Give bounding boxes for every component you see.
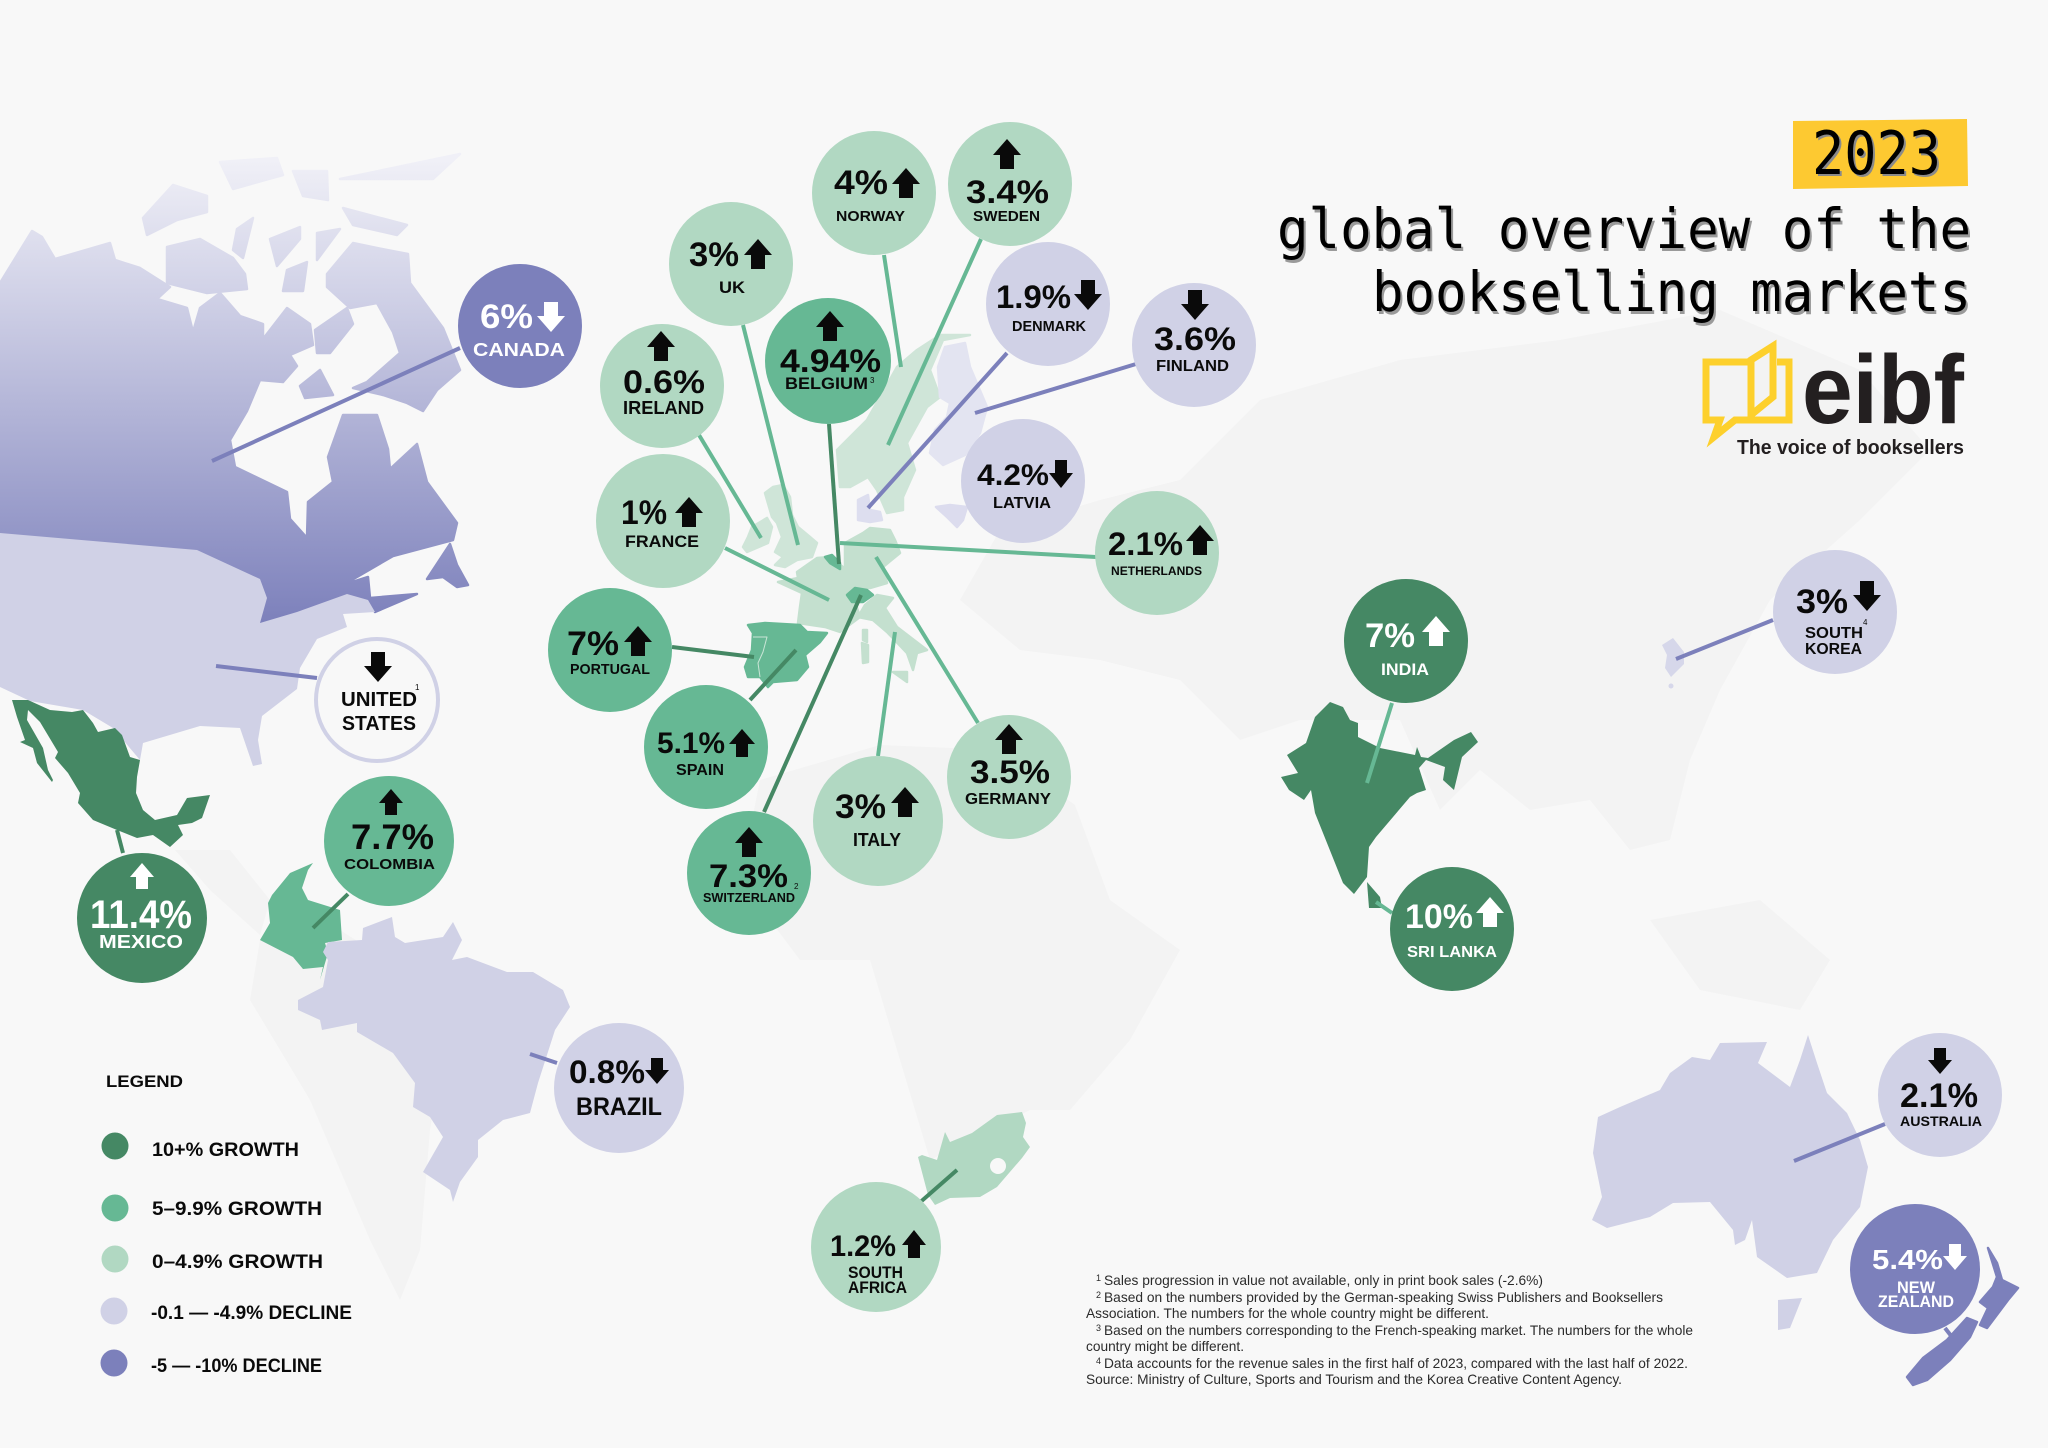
title: global overview of the: [1279, 200, 1973, 264]
leader lines: [117, 239, 1952, 1337]
bubble: France: [596, 454, 730, 588]
bubble: Netherlands: 2.1%: [1108, 526, 1183, 562]
bubble: Ireland: [600, 324, 724, 448]
footnotes: Based on the numbers provided by the German-speaking Swiss Publishers and Booksellers: [1104, 1290, 1663, 1305]
bubble: Switzerland: [687, 811, 811, 935]
bubble: Brazil: BRAZIL: [576, 1093, 662, 1121]
map: South Africa: [918, 1112, 1030, 1205]
legend: [100, 1072, 352, 1377]
footnotes: 4: [1096, 1356, 1101, 1366]
title: bookselling markets: [1374, 263, 1973, 327]
map: Denmark: [858, 495, 882, 522]
bubble: South Africa: AFRICA: [848, 1279, 907, 1297]
bubble: Denmark: DENMARK: [1012, 318, 1086, 335]
bubble: Belgium: 3: [870, 376, 875, 385]
bubble: Mexico: 11.4%: [90, 893, 192, 937]
footnotes: Association. The numbers for the whole country might be different.: [1086, 1306, 1489, 1321]
bubble: Italy: ITALY: [853, 830, 901, 850]
footnotes: 2: [1096, 1290, 1101, 1300]
legend: -0.1 — -4.9% DECLINE: [151, 1303, 352, 1324]
bubble: Canada: 6%: [480, 298, 533, 336]
bubble: Portugal: [548, 588, 672, 712]
bubble: India: [1344, 579, 1468, 703]
map: Colombia: [260, 863, 342, 980]
bubble: South Korea: 4: [1863, 618, 1868, 627]
bubble: Sweden: [948, 122, 1072, 246]
bubble: France: FRANCE: [625, 532, 699, 551]
map: Ireland: [743, 518, 772, 552]
bubble: Finland: [1132, 283, 1256, 407]
bubble: South Korea: KOREA: [1805, 641, 1862, 658]
map: United Kingdom: [765, 485, 817, 567]
bubble: Switzerland: 2: [794, 882, 799, 891]
map: South Korea: [1662, 638, 1684, 688]
legend: 0–4.9% GROWTH: [152, 1252, 323, 1273]
bubble: South Korea: [1773, 550, 1897, 674]
bubble: Spain: 5.1%: [657, 727, 725, 760]
map: Finland: [930, 343, 987, 465]
bubble: United States: 1: [415, 683, 420, 692]
bubble: Latvia: LATVIA: [993, 495, 1051, 512]
map: Switzerland: [847, 588, 873, 602]
bubble: United States: [316, 639, 438, 761]
bubble: Norway: 4%: [834, 164, 888, 202]
bubble: Brazil: 0.8%: [569, 1054, 645, 1090]
bubble: Canada: [458, 264, 582, 388]
map: Norway and Sweden: [837, 335, 970, 513]
bubble: Mexico: MEXICO: [99, 931, 183, 952]
logo: eibf: eibf: [1802, 335, 1965, 444]
bubble: Australia: AUSTRALIA: [1900, 1113, 1982, 1129]
bubble: Germany: GERMANY: [965, 791, 1051, 808]
bubble: Sri Lanka: 10%: [1405, 898, 1473, 936]
footnotes: [1086, 1273, 1693, 1387]
legend: 10+% GROWTH: [152, 1140, 299, 1161]
bubble: Ireland: 0.6%: [623, 364, 705, 400]
bubble: Germany: [947, 715, 1071, 839]
map: Belgium: [825, 555, 840, 569]
bubble: New Zealand: 5.4%: [1872, 1244, 1943, 1275]
bubble: Ireland: IRELAND: [623, 398, 704, 418]
bubble: Australia: [1878, 1033, 2002, 1157]
bubble: Colombia: 7.7%: [351, 818, 434, 857]
logo: eibf: [1706, 335, 1965, 459]
bubble: Switzerland: 7.3%: [709, 858, 788, 894]
bubble: Portugal: 7%: [567, 625, 619, 663]
footnotes: Based on the numbers corresponding to the French-speaking market. The numbers for the whole: [1104, 1323, 1693, 1338]
legend: 5–9.9% GROWTH: [152, 1199, 322, 1220]
bubble: India: 7%: [1365, 617, 1415, 655]
bubble: UK: [669, 202, 793, 326]
bubble: Netherlands: [1095, 491, 1219, 615]
title: global overview of the: [1277, 197, 1971, 261]
bubble: Netherlands: NETHERLANDS: [1111, 564, 1202, 578]
bubble: Sweden: 3.4%: [966, 174, 1049, 210]
bubble: Italy: [813, 756, 943, 886]
bubble: Mexico: [77, 853, 207, 983]
legend: LEGEND: [106, 1072, 183, 1091]
icon: yellow book speech bubble: [1706, 346, 1789, 437]
logo: eibf: The voice of booksellers: [1737, 437, 1964, 459]
bubble: Latvia: [961, 419, 1085, 543]
map: Brazil: [298, 917, 570, 1202]
bubble: Australia: 2.1%: [1900, 1077, 1978, 1115]
bubble: Colombia: [324, 776, 454, 906]
bubble: New Zealand: ZEALAND: [1878, 1292, 1954, 1311]
footnotes: 3: [1096, 1323, 1101, 1333]
map: Australia: [1592, 1035, 1868, 1330]
bubble: South Africa: 1.2%: [830, 1230, 896, 1263]
bubble: UK: UK: [719, 278, 746, 297]
bubble: Belgium: BELGIUM: [785, 374, 868, 393]
footnotes: country might be different.: [1086, 1339, 1244, 1354]
map: Spain and Portugal: [745, 623, 827, 687]
bubble: Canada: CANADA: [473, 340, 565, 360]
map: New Zealand: [1907, 1248, 2018, 1385]
bubble: Brazil: [554, 1023, 684, 1153]
map: India: [1281, 702, 1478, 894]
bubble: Portugal: PORTUGAL: [570, 661, 650, 678]
footnotes: Sales progression in value not available, only in print book sales (-2.6%): [1104, 1273, 1543, 1288]
bubble: Italy: 3%: [835, 788, 886, 826]
map: Germany: [845, 528, 900, 588]
bubble: Sri Lanka: [1390, 867, 1514, 991]
map: Italy: [858, 595, 927, 682]
legend: -5 — -10% DECLINE: [151, 1356, 322, 1377]
year badge: 2023: [1812, 119, 1941, 189]
bubble: Germany: 3.5%: [970, 754, 1050, 790]
map: United States: [0, 533, 375, 766]
map: France: [778, 557, 860, 632]
footnotes: Source: Ministry of Culture, Sports and Tourism and the Korea Creative Content Agency.: [1086, 1372, 1622, 1387]
footnotes: Data accounts for the revenue sales in the first half of 2023, compared with the last half of 2022.: [1104, 1356, 1688, 1371]
map: Latvia: [936, 505, 967, 527]
bubble: India: INDIA: [1381, 660, 1429, 679]
bubble: United States: STATES: [342, 713, 416, 735]
title: bookselling markets: [1372, 260, 1971, 324]
bubble: Belgium: [765, 298, 891, 424]
bubble: Colombia: COLOMBIA: [344, 856, 435, 873]
title: [1277, 197, 1973, 327]
bubble: France: 1%: [621, 494, 667, 532]
bubble: Latvia: 4.2%: [977, 459, 1049, 492]
bubble: Finland: 3.6%: [1154, 321, 1236, 357]
faint world map background: [175, 310, 1930, 1300]
year badge: 2023: [1814, 121, 1943, 191]
bubble: South Korea: 3%: [1796, 583, 1848, 621]
bubble: New Zealand: NEW: [1897, 1278, 1936, 1297]
bubble: Norway: NORWAY: [836, 208, 905, 225]
bubble: Spain: [644, 685, 768, 809]
bubble: Norway: [812, 131, 936, 255]
bubble: UK: 3%: [689, 236, 739, 274]
map: Mexico: [12, 700, 210, 847]
map: Canada: [0, 154, 468, 623]
bubble: New Zealand: [1850, 1204, 1980, 1334]
bubble: South Africa: SOUTH: [848, 1264, 903, 1282]
bubble: Switzerland: SWITZERLAND: [703, 891, 795, 905]
bubble: United States: UNITED: [341, 689, 417, 711]
bubble: Spain: SPAIN: [676, 762, 724, 779]
map: Europe: [743, 335, 987, 687]
bubble: Denmark: 1.9%: [996, 279, 1071, 315]
bubble: South Africa: [811, 1182, 941, 1312]
bubble: South Korea: SOUTH: [1805, 625, 1863, 642]
bubble: Belgium: 4.94%: [780, 343, 881, 379]
footnotes: 1: [1096, 1273, 1101, 1283]
map: Sri Lanka: [1367, 882, 1382, 908]
bubble: Sweden: SWEDEN: [973, 208, 1040, 225]
bubble: Sri Lanka: SRI LANKA: [1407, 944, 1497, 961]
bubble: Denmark: [986, 242, 1110, 366]
bubble: Finland: FINLAND: [1156, 358, 1229, 375]
